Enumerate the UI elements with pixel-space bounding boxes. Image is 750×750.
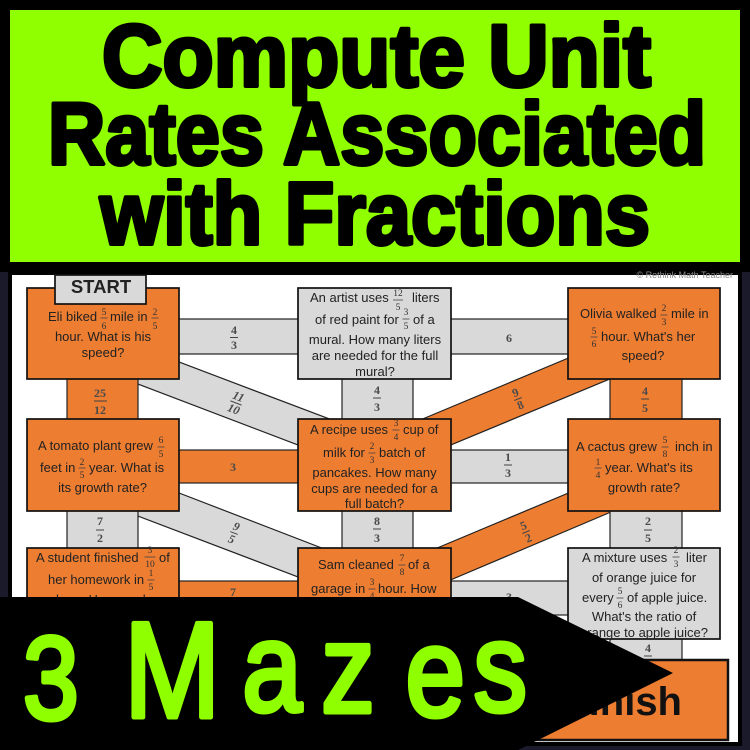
label: 5/2: 2 bbox=[523, 530, 534, 546]
title panel bbox=[10, 6, 740, 263]
connector: mixture to finish: 4 bbox=[645, 641, 651, 655]
question box: Sam: 3 bbox=[370, 578, 375, 588]
label: 9/5 bbox=[225, 518, 243, 547]
question box: student: 10 bbox=[145, 560, 155, 570]
question box: Olivia: 5 bbox=[592, 327, 597, 337]
question box: recipe: 2 bbox=[370, 442, 375, 452]
question box: artist bbox=[298, 288, 451, 379]
question box: recipe: 3 bbox=[370, 456, 375, 466]
question box: cactus: 5 bbox=[663, 436, 668, 446]
question box: artist: 5 bbox=[396, 303, 401, 313]
start tab bbox=[55, 275, 146, 304]
question box: Eli: 2 bbox=[153, 308, 158, 318]
question box: recipe: cups are needed for a bbox=[311, 481, 439, 496]
question box: mixture: 5 bbox=[618, 587, 623, 597]
question box: mixture: of apple juice. bbox=[627, 590, 707, 605]
diagonal connector: Eli to recipe bbox=[130, 359, 340, 450]
question box: mixture: of orange juice for bbox=[592, 570, 697, 585]
question box: recipe bbox=[298, 419, 451, 511]
question box: student: A student finished bbox=[36, 550, 139, 565]
connector: Eli to artist: 4 bbox=[231, 323, 237, 337]
title: Compute Unit bbox=[102, 6, 651, 105]
question box: mixture: What's the ratio of bbox=[592, 609, 697, 624]
question box: artist: liters bbox=[412, 290, 440, 305]
question box: student: 1 bbox=[149, 569, 154, 579]
label: 9/5: 5 bbox=[226, 531, 237, 547]
connector: tomato to student: 2 bbox=[97, 531, 103, 545]
connector: tomato to recipe: 3 bbox=[230, 460, 236, 474]
question box: recipe: A recipe uses bbox=[310, 422, 389, 437]
connector: cactus to mixture: 2 bbox=[645, 514, 651, 528]
question box: mixture: liter bbox=[686, 550, 708, 565]
question box: Olivia: speed? bbox=[622, 348, 664, 363]
question box: Eli: mile in bbox=[110, 309, 148, 324]
question box: mixture: 2 bbox=[674, 546, 679, 556]
question box: artist: of red paint for bbox=[315, 312, 399, 327]
question box: Olivia: 3 bbox=[662, 318, 667, 328]
connector: cactus to mixture: 5 bbox=[645, 531, 651, 545]
connector: Olivia to cactus: 5 bbox=[642, 401, 648, 415]
question box: student: her homework in bbox=[48, 572, 144, 587]
question box: Eli: 5 bbox=[153, 322, 158, 332]
maze worksheet panel bbox=[12, 270, 738, 742]
connector: tomato to student bbox=[67, 507, 138, 552]
question box: Olivia: Olivia walked bbox=[580, 306, 657, 321]
question box: student: of bbox=[159, 550, 170, 565]
connector: tomato to recipe bbox=[175, 450, 303, 483]
connector: recipe to cactus: 3 bbox=[505, 466, 511, 480]
connector: artist to recipe: 3 bbox=[374, 400, 380, 414]
start tab: START bbox=[71, 276, 132, 297]
question box: mixture: A mixture uses bbox=[582, 550, 668, 565]
question box: artist: mural. How many liters bbox=[309, 332, 442, 347]
question box: cactus: year. What's its bbox=[605, 460, 693, 475]
question box: tomato plant: 2 bbox=[80, 458, 85, 468]
connector: student to Sam: 7 bbox=[230, 585, 236, 599]
connector: Eli to tomato: 12 bbox=[94, 403, 106, 417]
label: 11/10: 11 bbox=[231, 388, 246, 405]
diagonal connector: tomato to Sam bbox=[130, 490, 332, 582]
connector: tomato to student: 7 bbox=[97, 514, 103, 528]
copyright note: © Rethink Math Teacher bbox=[636, 270, 733, 280]
label: 9/5: 9 bbox=[231, 519, 242, 534]
question box: Eli bbox=[27, 288, 179, 379]
question box: tomato plant: A tomato plant grew bbox=[38, 438, 154, 453]
question box: cactus: A cactus grew bbox=[576, 439, 658, 454]
connector: recipe to Sam: 8 bbox=[374, 514, 380, 528]
question box: Olivia: mile in bbox=[671, 306, 709, 321]
question box: tomato plant: 6 bbox=[159, 436, 164, 446]
label: 11/10: 10 bbox=[226, 400, 242, 418]
connector: cactus to mixture bbox=[610, 507, 682, 552]
label: 5/2: 5 bbox=[518, 518, 529, 533]
question box: Eli: 6 bbox=[102, 322, 107, 332]
connector: recipe to Sam: 3 bbox=[374, 531, 380, 545]
question box: Sam: 4 bbox=[370, 592, 375, 602]
banner text: M bbox=[124, 594, 220, 746]
question box: mixture: orange to apple juice? bbox=[580, 625, 708, 640]
question box: Olivia: 6 bbox=[592, 340, 597, 350]
question box: Sam: 7 bbox=[400, 554, 405, 564]
question box: Sam: garage in bbox=[311, 581, 365, 596]
question box: Sam bbox=[298, 548, 451, 639]
question box: Eli: Eli biked bbox=[48, 309, 97, 324]
question box: cactus: 8 bbox=[663, 450, 668, 460]
banner text: 3 bbox=[23, 613, 79, 745]
question box: student: 5 bbox=[149, 583, 154, 593]
question box: Sam: 8 bbox=[400, 568, 405, 578]
question box: mixture: 6 bbox=[618, 601, 623, 611]
question box: tomato plant bbox=[27, 419, 179, 511]
question box: student: hour. How much bbox=[56, 592, 150, 607]
question box: cactus: 1 bbox=[596, 458, 601, 468]
banner text: e bbox=[405, 602, 465, 743]
question box: recipe: 3 bbox=[394, 419, 399, 429]
question box: tomato plant: 5 bbox=[80, 471, 85, 481]
diagonal connector: Olivia to recipe bbox=[413, 354, 617, 449]
banner text: s bbox=[473, 597, 527, 738]
connector: artist to Olivia: 6 bbox=[506, 331, 512, 345]
connector: Sam to mixture: 3 bbox=[506, 590, 512, 604]
question box: mixture bbox=[568, 546, 720, 640]
question box: cactus: 4 bbox=[596, 471, 601, 481]
question box: artist: mural? bbox=[355, 364, 395, 379]
connector: recipe to Sam bbox=[342, 507, 413, 552]
connector: Eli to artist bbox=[175, 319, 303, 354]
question box: Sam: of a bbox=[408, 557, 430, 572]
question box: tomato plant: feet in bbox=[40, 460, 75, 475]
connector: recipe to cactus bbox=[447, 450, 573, 483]
connector: artist to recipe bbox=[342, 375, 413, 423]
label: 9/8: 8 bbox=[515, 397, 526, 413]
question box: recipe: 4 bbox=[394, 433, 399, 443]
banner text: z bbox=[321, 598, 375, 739]
title: with Fractions bbox=[99, 164, 650, 263]
label: 5/2 bbox=[517, 518, 535, 546]
question box: Olivia: 2 bbox=[662, 304, 667, 314]
connector: Eli to tomato: 25 bbox=[94, 386, 106, 400]
question box: artist: An artist uses bbox=[310, 290, 389, 305]
question box: Eli: 5 bbox=[102, 308, 107, 318]
question box: Sam: hour. How bbox=[378, 581, 437, 596]
question box: artist: 12 bbox=[393, 289, 403, 299]
connector: Olivia to cactus: 4 bbox=[642, 384, 648, 398]
connector: recipe to cactus: 1 bbox=[505, 450, 511, 464]
question box: artist: of a bbox=[413, 312, 435, 327]
question box: artist: 5 bbox=[404, 322, 409, 332]
question box: recipe: full batch? bbox=[345, 496, 404, 511]
question box: student: 3 bbox=[148, 546, 153, 556]
question box: artist: 3 bbox=[404, 308, 409, 318]
question box: tomato plant: 5 bbox=[159, 450, 164, 460]
question box: tomato plant: its growth rate? bbox=[58, 480, 147, 495]
label: 11/10 bbox=[226, 388, 247, 418]
question box: Eli: speed? bbox=[82, 345, 124, 360]
question box: mixture: every bbox=[582, 590, 614, 605]
connector: student to Sam bbox=[175, 581, 303, 615]
question box: cactus bbox=[568, 419, 720, 511]
finish box bbox=[500, 660, 728, 740]
question box: mixture: 3 bbox=[674, 560, 679, 570]
banner text: a bbox=[242, 597, 303, 738]
label: 9/8: 9 bbox=[510, 385, 521, 400]
connector: mixture to finish bbox=[610, 635, 682, 665]
question box: Olivia bbox=[568, 288, 720, 379]
question box: student bbox=[27, 546, 179, 639]
question box: cactus: inch in bbox=[675, 439, 713, 454]
question box: Eli: hour. What is his bbox=[55, 329, 152, 344]
label: 9/8 bbox=[509, 385, 527, 413]
connector: Eli to tomato bbox=[67, 375, 138, 423]
question box: cactus: growth rate? bbox=[608, 480, 680, 495]
question box: Olivia: hour. What's her bbox=[601, 329, 696, 344]
connector: Eli to artist: 3 bbox=[231, 338, 237, 352]
diagonal connector: cactus to Sam bbox=[430, 489, 618, 584]
question box: tomato plant: year. What is bbox=[89, 460, 165, 475]
connector: Olivia to cactus bbox=[610, 375, 682, 423]
connector: Sam to mixture bbox=[447, 581, 573, 615]
connector: artist to recipe: 4 bbox=[374, 383, 380, 397]
question box: recipe: milk for bbox=[323, 445, 366, 460]
question box: recipe: batch of bbox=[379, 445, 426, 460]
question box: recipe: cup of bbox=[403, 422, 439, 437]
finish box: Finish bbox=[564, 680, 682, 724]
connector: artist to Olivia bbox=[447, 319, 573, 354]
question box: recipe: pancakes. How many bbox=[312, 465, 437, 480]
question box: artist: are needed for the full bbox=[312, 348, 438, 363]
question box: Sam: Sam cleaned bbox=[318, 557, 394, 572]
banner: 3 Mazes bbox=[0, 594, 673, 750]
